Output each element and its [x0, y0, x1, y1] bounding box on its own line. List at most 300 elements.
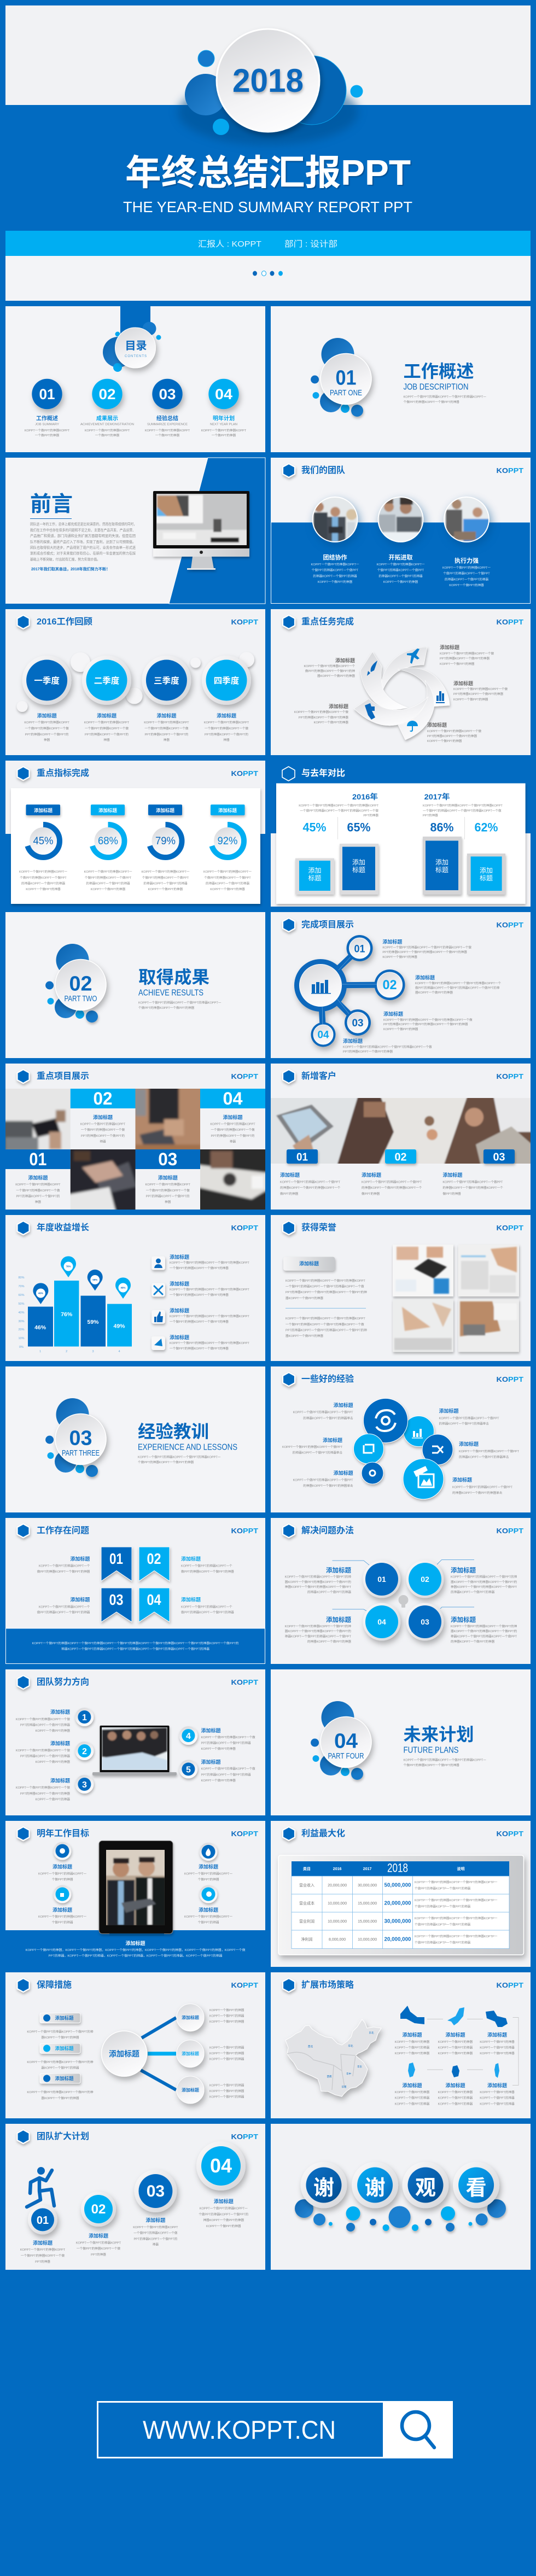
text: client 1: 添加标题	[280, 1172, 300, 1178]
block 02: 一个做PPT的神器KOPPT一个做	[81, 1128, 125, 1132]
callout: 2017年我们取其奋战，2018年我们努力不断！	[31, 566, 110, 571]
text: left 3: KOPPT一个做PPT的神器KOPPT一个做PPT	[293, 1478, 353, 1482]
map of China: 西南	[327, 2075, 332, 2078]
text: client 3	[442, 1172, 503, 1196]
heading	[18, 767, 258, 780]
list item: tools: 添加标题	[170, 1281, 189, 1287]
text: solution 1: KOPPT一个做PPT的神器KOPPT一个做PPT的神	[285, 1575, 351, 1579]
footer text	[25, 1940, 246, 1958]
icon: shuffle	[432, 1446, 443, 1453]
measure 3: KOPPT一个做PPT的神器KOPPT一个做PPT的神	[27, 2090, 94, 2094]
item 01	[25, 379, 70, 437]
quarter 3: 三季度	[154, 675, 179, 686]
panel: key projects	[3, 1064, 268, 1214]
icon: section circles	[45, 944, 106, 1023]
text: solution 2: KOPPT一个做PPT的神器KOPPT一个做PPT的神	[451, 1575, 517, 1579]
icon: bars	[412, 1429, 423, 1438]
bar chart: 20%	[18, 1328, 25, 1331]
column 2016: 45%	[303, 821, 326, 834]
text: problem 2: 添加标题	[181, 1556, 201, 1562]
heading	[18, 1675, 258, 1689]
step 02: 02	[91, 2202, 106, 2217]
table: 类目	[303, 1866, 311, 1871]
section title	[138, 967, 222, 1010]
text: item 03: KOPPT一个做PPT的神器	[383, 1027, 418, 1031]
measure 3: 添加标题	[55, 2076, 74, 2081]
region: southwest: KOPPT一个做PPT的神器	[480, 2051, 515, 2055]
heading	[282, 767, 345, 781]
table: 个做PPT的神器KOPTP一个做PPT的神器	[415, 1922, 471, 1926]
text: execution: 的神器KOPPT一个做PPT的神器	[445, 577, 488, 581]
text: forge ahead: 开拓进取	[388, 553, 412, 561]
bar chart: 70%	[18, 1285, 25, 1288]
table: 15,000,000	[358, 1902, 377, 1906]
panel: market expansion	[271, 1972, 531, 2118]
indicator 68%: 68%	[98, 836, 118, 847]
goal 2: KOPPT一个做PPT的神器KOPPT一	[38, 1914, 86, 1919]
quarter 1	[22, 656, 72, 742]
heading: 新增客户	[301, 1071, 336, 1081]
text: team unity: 团结协作	[323, 553, 347, 561]
step 03: 03	[147, 2182, 165, 2200]
text: execution: KOPPT一个做PPT的神器	[449, 583, 484, 587]
numbers: 01	[354, 943, 365, 955]
white card	[276, 783, 526, 904]
text: right 2: KOPPT一个做PPT的神器KOPPT一个做PPT	[459, 1449, 520, 1453]
step 04: 个做PPT的神器KOPPT一个做PPT的	[199, 2212, 249, 2216]
block 02	[71, 1089, 136, 1144]
badge 看	[453, 2162, 499, 2208]
text: item 02: KOPPT一个做PPT的神器KOPPT一个做PPT的神器KOPPT一个	[415, 981, 501, 985]
panel: completed projects	[271, 912, 531, 1058]
icon: decorative circles	[185, 50, 363, 135]
heading: 完成项目展示	[301, 919, 354, 930]
node bottom: 添加标题	[182, 2087, 199, 2093]
bar chart: 80%	[18, 1276, 25, 1280]
icon: umbrella	[407, 721, 418, 732]
ribbon 04	[139, 1588, 170, 1622]
list item: thumbs up: KOPPT一个做PPT的神器KOPPT一个做PPT的神器KOPPT	[170, 1314, 249, 1318]
section title: KOPPT一个做PPT的神器KOPPT一个做PPT的神器KOPPT一	[404, 395, 486, 399]
text: problem 2: 做PPT的神器KOPPT一个做PPT的神器	[181, 1569, 234, 1574]
panel: part four	[271, 1669, 531, 1815]
text: direction 2: KOPPT一个做PPT的神器KOPPT一个做	[16, 1748, 70, 1753]
indicator 92%: 添加标题	[218, 808, 237, 813]
table: KOPTP一个做PPT的神器KOPTP一个做PPT的神器KOPTP一	[415, 1880, 498, 1884]
text: direction 1: KOPPT一个做PPT的神器KOPPT一个做	[16, 1717, 70, 1721]
goal 3: KOPPT一个做PPT的神器KOPPT一	[184, 1872, 232, 1876]
section title: KOPPT一个做PPT的神器KOPPT一个做PPT的神器KOPPT一	[404, 1757, 486, 1762]
section number	[62, 1427, 100, 1458]
text: forge ahead: 个做PPT的神器KOPPT一个做PPT	[377, 568, 424, 573]
icon: rocket	[367, 661, 377, 676]
region: south: KOPPT一个做PPT的神器	[480, 2096, 515, 2100]
region: central: KOPPT一个做PPT的神器	[438, 2101, 473, 2106]
heading: 团队扩大计划	[37, 2131, 89, 2141]
heading	[283, 615, 523, 629]
text: client 3: 添加标题	[442, 1172, 462, 1178]
icon: gear	[370, 1470, 375, 1476]
text: problem 3: 添加标题	[70, 1597, 90, 1603]
section number: PART ONE	[330, 389, 362, 398]
numbers: 04	[317, 1030, 329, 1041]
text: item 01: PPT的神器KOPPT一个做PPT的神器KOPPT一个做PPT的神器	[382, 950, 467, 954]
indicator 68%: 添加标题	[98, 808, 117, 813]
block 03: KOPPT一个做PPT的神器KOPPT	[145, 1182, 190, 1187]
map of China: 华东	[357, 2065, 362, 2069]
table: 20,000,000	[384, 1901, 411, 1906]
text: task 2: PPT的神器KOPPT一个做PPT的神器	[440, 656, 490, 661]
ribbon 03	[101, 1588, 132, 1622]
table: 个做PPT的神器KOPTP一个做PPT的神器	[415, 1886, 471, 1890]
text: solution 2: 添加标题	[451, 1566, 476, 1574]
heading	[18, 1070, 258, 1083]
badge 观	[403, 2162, 448, 2208]
text: problem 1: KOPPT一个做PPT的神器KOPPT一个	[39, 1564, 90, 1568]
text: problem 3: 做PPT的神器KOPPT一个做PPT的神器	[37, 1610, 90, 1615]
section number	[65, 972, 97, 1003]
table: 营业成本	[299, 1901, 314, 1906]
text: task 1: 添加标题	[335, 657, 355, 663]
list item: person: 添加标题	[170, 1254, 189, 1260]
badge 03	[483, 1149, 515, 1164]
item 03: SUMMARIZE EXPERIENCE	[147, 423, 188, 427]
text: task 3: 添加标题	[453, 680, 473, 686]
block 02: 添加标题	[93, 1114, 113, 1120]
heading: 目录	[125, 340, 147, 352]
badge 谢: 谢	[313, 2177, 334, 2200]
text: item 04: KOPPT一个做PPT的神器KOPPT一个做PPT的神器KOPPT一个做	[343, 1044, 432, 1049]
quarter 1: 添加标题	[37, 712, 57, 719]
goal 4: 个做PPT的神器	[198, 1920, 219, 1925]
badge 5: 5	[186, 1765, 191, 1774]
text: direction 3: KOPPT一个做PPT的神器KOPPT一个做	[16, 1785, 70, 1790]
text: direction 5: PPT的神器KOPPT一个做PPT的神器	[201, 1773, 251, 1777]
text: task 1	[304, 657, 355, 678]
text: solution 1: 的神器KOPPT一个做PPT的神器	[307, 1590, 351, 1594]
block 1	[295, 858, 334, 895]
badge 01: 01	[296, 1152, 308, 1164]
table: 2018	[387, 1861, 408, 1875]
ribbon 04: 04	[147, 1591, 161, 1608]
indicator 92%	[203, 804, 252, 891]
badge 2	[75, 1742, 94, 1760]
section title: 个做PPT的神器KOPPT一个做PPT的神器	[404, 1763, 459, 1767]
text: right 3: 添加标题	[452, 1477, 472, 1483]
heading: 重点指标完成	[37, 768, 89, 778]
bar chart: 60%	[18, 1294, 25, 1297]
quarter 1: KOPPT一个做PPT的神器KOPPT	[24, 720, 69, 725]
text: item 01: 添加标题	[382, 939, 402, 945]
region: central: 添加标题	[445, 2082, 465, 2088]
indicator 45%: 的神器KOPPT一个做PPT的神器	[21, 881, 65, 886]
indicator 45%: KOPPT一个做PPT的神器KOPPT一	[19, 869, 67, 874]
column 2016	[299, 792, 379, 839]
quarter 3: 添加标题	[156, 712, 176, 719]
goal 1: 添加标题	[53, 1864, 72, 1870]
node top: 添加标题	[182, 2015, 199, 2020]
section title: 工作概述	[404, 361, 474, 381]
block 3: 标题	[435, 866, 448, 874]
bar chart: 0%	[19, 1346, 24, 1349]
heading: KOPPT	[497, 1981, 523, 1989]
text: right 2: 添加标题	[459, 1441, 479, 1447]
numbers: 03	[352, 1018, 363, 1029]
text: right 1: 添加标题	[439, 1408, 459, 1414]
text: task 2: 添加标题	[440, 644, 459, 650]
text: task 5: KOPPT一个做PPT的神器KOPPT一个做	[294, 710, 348, 714]
table: 10,000,000	[328, 1920, 347, 1924]
goal 3: 个做PPT的神器	[198, 1877, 219, 1882]
text: problem 3	[37, 1597, 90, 1615]
year label: 2018	[232, 62, 304, 99]
bar chart: 59%	[87, 1319, 99, 1325]
map of China	[286, 2019, 381, 2096]
text: task 5	[294, 703, 348, 725]
text: client 1: 的神器KOPPT一个做PPT的神器KOPPT一个	[280, 1185, 341, 1190]
text: direction 1: 添加标题	[50, 1709, 70, 1715]
quarter 4: 神器	[223, 738, 230, 742]
list item: megaphone: KOPPT一个做PPT的神器KOPPT一个做PPT的神器KOPPT	[170, 1341, 249, 1345]
measure 2	[27, 2043, 94, 2070]
heading: 我们的团队	[301, 465, 345, 475]
node middle: KOPPT一个做PPT的神器	[209, 2045, 244, 2049]
list item: tools: KOPPT一个做PPT的神器KOPPT一个做PPT的神器KOPPT	[170, 1287, 249, 1292]
measure 3: 器KOPPT一个做PPT的神器	[42, 2096, 79, 2100]
paragraph: 团队也取得很大的进步，产品得到了用户的认可，业务合作由单一形式逐	[30, 545, 136, 550]
column 2017: 86%	[430, 821, 454, 834]
quarter 3: 一个做PPT的神器KOPPT一个做	[144, 726, 189, 731]
text: forge ahead: 的神器KOPPT一个做PPT的神器	[378, 574, 423, 578]
measure 1: 器KOPPT一个做PPT的神器	[42, 2035, 79, 2040]
block 03: 添加标题	[158, 1175, 178, 1181]
goal 3	[184, 1843, 232, 1882]
region: southwest: KOPPT一个做PPT的神器	[480, 2040, 515, 2044]
item 01: KOPPT一个做PPT的神器KOPPT	[25, 428, 70, 433]
icon: magnifier	[402, 2412, 434, 2448]
text: solution 1: 神器KOPPT一个做PPT的神器KOPPT一个做PPT	[285, 1585, 352, 1589]
text: direction 4: 添加标题	[201, 1727, 221, 1733]
heading: CONTENTS	[125, 355, 147, 358]
heading: 扩展市场策略	[301, 1979, 354, 1990]
step 01: 添加标题	[33, 2240, 53, 2246]
subtitle: THE YEAR-END SUMMARY REPORT PPT	[123, 198, 412, 215]
text: item 04	[343, 1038, 432, 1054]
quarter 2: KOPPT一个做PPT的神器KOPPT	[84, 720, 130, 725]
heading: 一些好的经验	[301, 1374, 354, 1384]
goal 2: 添加标题	[53, 1907, 72, 1913]
text: solution 2: 器KOPPT一个做PPT的神器KOPPT一个做PPT的	[451, 1580, 517, 1584]
indicator 79%	[142, 804, 190, 891]
quarter 1: 一个做PPT的神器KOPPT一个做	[25, 726, 69, 731]
icon: picture	[413, 1466, 434, 1487]
indicator 45%: 45%	[33, 836, 54, 847]
goal 1: 个做PPT的神器	[52, 1877, 73, 1882]
section title: 取得成果	[138, 967, 209, 987]
column 2017: 2017年	[424, 792, 450, 801]
indicator 45%: 个做PPT的神器KOPPT一个做PPT	[20, 875, 67, 880]
step 01: 01	[37, 2215, 49, 2227]
badge 02: 02	[395, 1152, 407, 1164]
ribbon 02	[139, 1547, 170, 1581]
ribbon 01	[101, 1547, 132, 1581]
block 3: 添加	[435, 858, 448, 866]
panel: work problems	[5, 1518, 265, 1664]
heading: 重点项目展示	[37, 1071, 89, 1081]
badge 5	[179, 1760, 197, 1778]
text: problem 1: 添加标题	[70, 1556, 90, 1562]
quarter 1: PPT的神器KOPPT一个做PPT的	[25, 732, 69, 737]
chart: pinwheel	[354, 647, 450, 740]
bar chart: 49%	[113, 1323, 125, 1330]
panel: next year goals	[5, 1821, 265, 1967]
footer text: 神器KOPPT一个做PPT的神器KOPPT一个做PPT的神器KOPPT一个做PPT的神器KOPPT一个做PPT的神器	[61, 1647, 209, 1651]
text: left 1: 的神器KOPPT一个做PPT的神器单击	[303, 1416, 353, 1420]
section title	[404, 1725, 486, 1767]
circle 02: 02	[421, 1575, 429, 1584]
measure 1	[27, 2013, 94, 2040]
node bottom: KOPPT一个做PPT的神器	[209, 2089, 244, 2093]
block 02: PPT的神器KOPPT一个做PPT的	[81, 1134, 125, 1138]
quarter 2: 二季度	[94, 675, 120, 686]
bar chart: 2	[66, 1350, 67, 1353]
block 01: 神器	[35, 1200, 41, 1204]
step 03: 一个做PPT的神器KOPPT一个做	[133, 2231, 178, 2235]
indicator 92%: 92%	[218, 836, 238, 847]
region: north: KOPPT一个做PPT的神器	[438, 2045, 473, 2049]
block 4: 标题	[480, 874, 493, 882]
icon: light bulb	[398, 1595, 408, 1608]
block 02: 02	[93, 1089, 113, 1108]
column 2017: 一个做PPT的神器KOPPT一个做PPT的神器KOPPT一个做	[423, 808, 502, 813]
marker 76%: 76%	[66, 1265, 71, 1267]
column 2016: 65%	[347, 821, 371, 834]
item 03: 经验总结	[156, 414, 178, 422]
heading	[125, 340, 147, 358]
item 03	[145, 379, 190, 437]
heading	[18, 1221, 258, 1235]
node middle: KOPPT一个做PPT的神器	[209, 2057, 244, 2061]
block 04: 一个做PPT的神器KOPPT一个做	[211, 1128, 255, 1132]
item 02: 02	[98, 386, 116, 402]
text block one: 器KOPPT一个做PPT的神器	[286, 1296, 323, 1300]
section title: KOPPT一个做PPT的神器KOPPT一个做PPT的神器KOPPT一	[138, 1001, 222, 1005]
step 02: 添加标题	[89, 2233, 108, 2239]
panel: our team	[271, 458, 531, 604]
text: solution 4: 神器KOPPT一个做PPT的神器KOPPT一个做PPT	[285, 1634, 352, 1639]
item 03: KOPPT一个做PPT的神器KOPPT	[145, 428, 190, 433]
icon: contents bubbles	[103, 322, 161, 372]
paragraph: 团队这一年的工作，总体上都完成还是比较满意的，然而在取得成绩的同时，	[30, 522, 137, 527]
numbers	[317, 943, 397, 1041]
region: central: KOPPT一个做PPT的神器	[438, 2096, 473, 2100]
text: item 01: KOPPT一个做PPT的神器KOPPT一个做PPT的神器KOPPT一个做	[382, 945, 471, 950]
table: KOPTP一个做PPT的神器KOPTP一个做PPT的神器KOPTP一	[415, 1898, 498, 1902]
text: right 3: 的神器KOPPT一个做PPT的神器单击	[452, 1491, 503, 1495]
paragraph: 队不断的探索，最终产品打入了市场，实现了盈利，达到了公司预期值。	[30, 539, 136, 544]
column 2017: PPT的神器	[423, 813, 438, 817]
panel: good experience	[271, 1366, 531, 1512]
text: team unity: 的神器KOPPT一个做PPT的神器	[313, 574, 357, 578]
block 04: 神器	[230, 1140, 236, 1144]
text: problem 2: KOPPT一个做PPT的神器KOPPT一个	[181, 1564, 232, 1568]
indicator 45%	[19, 804, 67, 891]
circle 04	[363, 1603, 400, 1640]
text: problem 1: 做PPT的神器KOPPT一个做PPT的神器	[37, 1569, 90, 1574]
photo: phone on desk	[5, 1089, 70, 1149]
panel: team expansion	[5, 2124, 265, 2270]
icon: section circles	[311, 338, 371, 417]
step 04: 04	[210, 2154, 232, 2177]
icon: laptop with photo	[92, 1724, 177, 1775]
bar chart: 40%	[18, 1311, 25, 1315]
heading: KOPPT	[497, 1375, 523, 1383]
badge 4: 4	[186, 1732, 191, 1741]
text block two: 器KOPPT一个做PPT的神器	[286, 1334, 323, 1338]
heading	[18, 1978, 258, 1992]
table: 30,000,000	[358, 1884, 377, 1888]
photo: tablet on desk	[393, 1245, 453, 1296]
badge 谢 second: 谢	[365, 2177, 386, 2200]
text: client 3: 的神器KOPPT一个做PPT的神器KOPPT一个	[442, 1185, 503, 1190]
text: direction 5: KOPPT一个做PPT的神器	[201, 1778, 236, 1783]
list item: megaphone: 添加标题	[170, 1334, 189, 1340]
step 01: 一个做PPT的神器KOPPT一个做	[21, 2253, 65, 2258]
section title: 个做PPT的神器KOPPT一个做PPT的神器	[404, 400, 459, 404]
list item: person: KOPPT一个做PPT的神器KOPPT一个做PPT的神器KOPPT	[170, 1260, 249, 1265]
node middle	[177, 2040, 244, 2067]
region: central	[438, 2065, 473, 2106]
section title: KOPPT一个做PPT的神器KOPPT一个做PPT的神器KOPPT一	[138, 1455, 221, 1459]
text: right 2: 的神器KOPPT一个做PPT的神器单击	[459, 1455, 509, 1459]
heading: KOPPT	[231, 1527, 258, 1535]
text: item 02: 做PPT的神器KOPPT一个做PPT的神器KOPPT一个做PPT的神	[415, 986, 500, 990]
text: solution 1: 添加标题	[326, 1566, 351, 1574]
block 1: 标题	[308, 874, 322, 882]
table: 说明	[457, 1866, 465, 1871]
item 02: 一个做PPT的神器	[95, 433, 120, 437]
text: direction 2: 添加标题	[50, 1740, 70, 1746]
search bar	[97, 2401, 453, 2458]
heading: KOPPT	[231, 1830, 258, 1838]
region: north: KOPPT一个做PPT的神器	[438, 2051, 473, 2055]
panel: part one	[271, 306, 531, 452]
text: solution 3: 器KOPPT一个做PPT的神器KOPPT一个做PPT的	[451, 1629, 517, 1633]
node top: KOPPT一个做PPT的神器	[209, 2019, 244, 2024]
step 03	[133, 2170, 178, 2247]
text: client 3: KOPPT一个做PPT的神器KOPPT一个做PPT	[442, 1180, 503, 1184]
paragraph: 产品推广和渠道，部门沟通和业务扩展方面都有明显的失误。但是在团	[30, 533, 136, 538]
section title: FUTURE PLANS	[404, 1745, 458, 1755]
region: east	[395, 2063, 430, 2106]
table card	[278, 1855, 524, 1955]
circle 01: 01	[377, 1575, 386, 1584]
text: item 03: KOPPT一个做PPT的神器KOPPT一个做PPT的神器KOPPT一个做	[383, 1018, 473, 1022]
panel: new clients	[268, 1064, 533, 1210]
column 2016: 2016年	[352, 792, 378, 801]
quarter 4: 四季度	[214, 675, 240, 686]
section title	[404, 361, 486, 404]
indicator 79%: KOPPT一个做PPT的神器	[148, 887, 183, 891]
text: direction 3: 添加标题	[50, 1778, 70, 1784]
table: 个做PPT的神器KOPTP一个做PPT的神器	[415, 1904, 471, 1908]
text: direction 1	[16, 1709, 70, 1733]
heading: KOPPT	[231, 2133, 258, 2141]
block 01: 01	[29, 1149, 46, 1169]
block 4	[467, 854, 505, 895]
badge 4	[179, 1726, 197, 1745]
text: task 5: 添加标题	[329, 703, 348, 709]
